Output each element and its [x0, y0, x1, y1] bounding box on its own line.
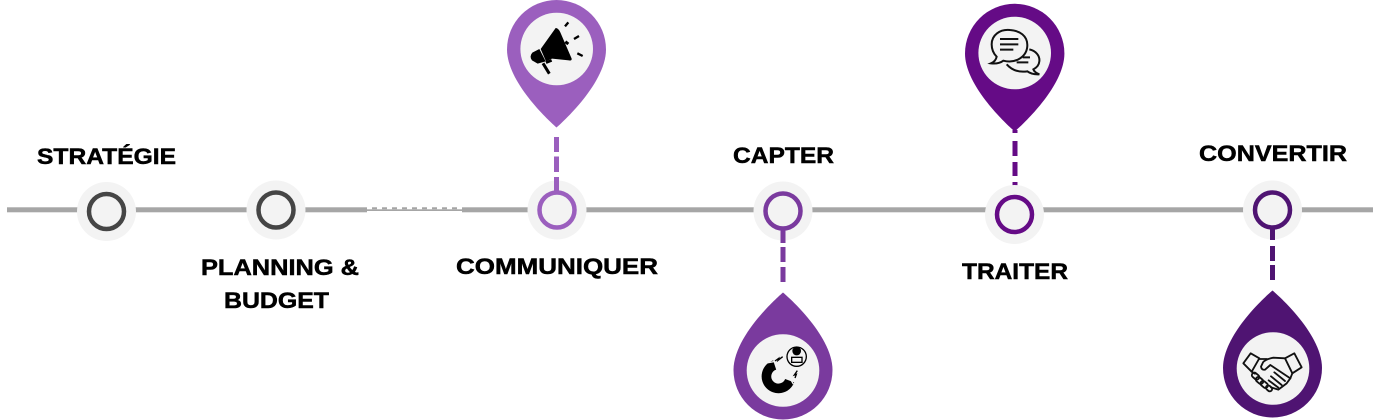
step: capter — [733, 143, 834, 282]
drop: convertir — [1223, 290, 1322, 418]
step: planning et budget: PLANNING & — [201, 255, 359, 280]
step: convertir: CONVERTIR — [1199, 141, 1347, 166]
step: stratégie — [37, 144, 176, 241]
step: communiquer: COMMUNIQUER — [456, 254, 658, 279]
step: traiter — [962, 130, 1068, 284]
step: convertir — [1199, 141, 1347, 280]
pin: traiter — [965, 4, 1064, 131]
step: planning et budget — [201, 180, 359, 313]
step: capter: CAPTER — [733, 143, 834, 168]
icon: megaphone — [531, 22, 583, 74]
step: traiter: TRAITER — [962, 259, 1068, 284]
drop: capter — [734, 292, 832, 420]
pin: communiquer — [507, 0, 606, 128]
step: planning et budget: BUDGET — [224, 288, 330, 313]
step: stratégie: STRATÉGIE — [37, 144, 176, 169]
icon: magnet attracting a person — [766, 347, 806, 388]
timeline line — [7, 207, 1373, 213]
icon: chat bubbles — [991, 30, 1039, 74]
icon: handshake — [1243, 353, 1302, 392]
step: communiquer — [456, 137, 658, 279]
